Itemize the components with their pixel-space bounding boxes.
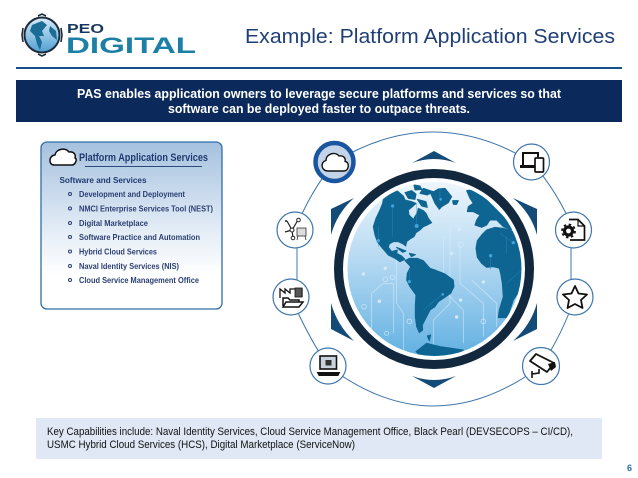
icon: gear document (556, 212, 592, 248)
icon: secure laptop (310, 348, 346, 384)
key capabilities box (36, 418, 602, 459)
logo: PEO Digital: DIGITAL (66, 33, 196, 58)
service list: NMCI Enterprise Services Tool (NEST) (79, 204, 213, 214)
page number: 6 (627, 463, 632, 473)
globe (338, 174, 530, 364)
service list: Naval Identity Services (NIS) (79, 262, 179, 271)
logo: PEO Digital: PEO (67, 21, 104, 36)
icon: security camera (522, 348, 560, 384)
header rule (16, 67, 622, 69)
service list: Digital Marketplace (79, 219, 148, 228)
key capabilities box: Key Capabilities include: Naval Identity Services, Cloud Service Management Office, Black Pearl (DEVSECOPS – CI/CD), (47, 426, 573, 438)
service list: Software Practice and Automation (79, 233, 200, 242)
key capabilities box: USMC Hybrid Cloud Services (HCS), Digital Marketplace (ServiceNow) (47, 439, 355, 451)
circuit nodes (377, 198, 515, 296)
icon: cloud (selected) (316, 143, 354, 181)
service list: Cloud Service Management Office (79, 276, 199, 285)
panel heading: Platform Application Services (79, 152, 208, 164)
panel: Platform Application Services (41, 142, 222, 309)
icon: network presentation (277, 212, 313, 248)
banner: PAS enables application owners to leverage secure platforms and services so that (77, 87, 562, 101)
service list (68, 190, 213, 285)
subheading: Software and Services (60, 175, 147, 185)
direction chevrons (331, 151, 537, 388)
logo: PEO Digital (22, 14, 196, 58)
service list: Hybrid Cloud Services (79, 248, 157, 256)
banner: software can be deployed faster to outpace threats. (168, 102, 470, 116)
title: Example: Platform Application Services (245, 25, 615, 48)
land circuit lines (378, 190, 522, 310)
service list: Development and Deployment (79, 190, 185, 199)
icon: panel cloud (50, 149, 76, 165)
icon: folder and files (273, 279, 309, 315)
icon: star (557, 279, 593, 315)
banner (16, 80, 622, 122)
continents (373, 185, 530, 358)
diagram connecting ring (291, 132, 575, 406)
icon: devices (514, 144, 550, 180)
circuit lines (372, 227, 497, 350)
